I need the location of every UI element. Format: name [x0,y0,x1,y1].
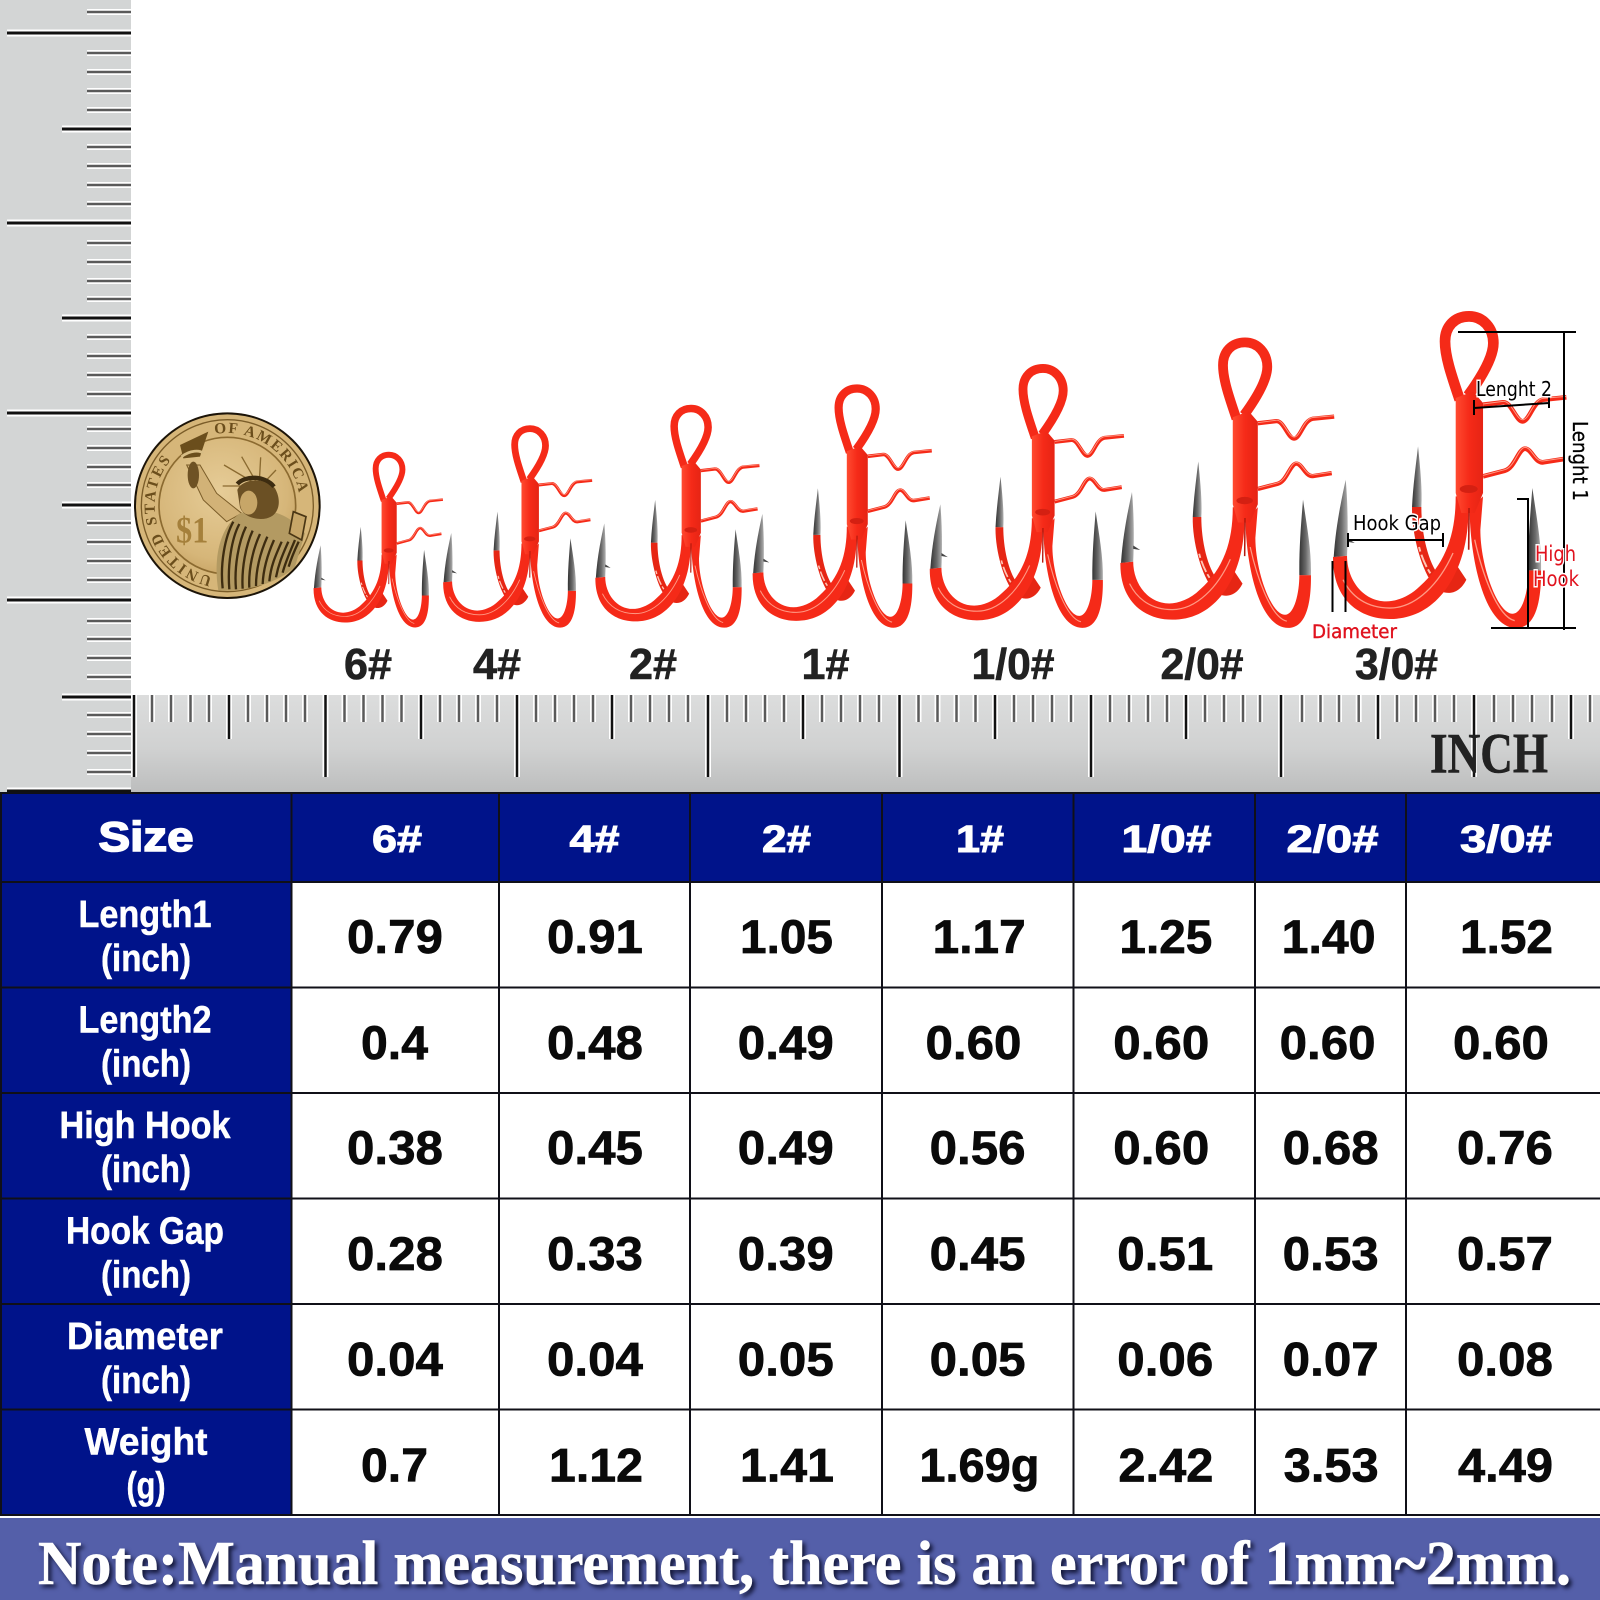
row: Weight values: 3.53 [1284,1438,1379,1492]
row labels: Weight [84,1422,208,1464]
specification table [0,793,1600,1516]
row: Diameter values: 0.06 [1117,1332,1213,1386]
annotation: High Hook: High [1535,542,1576,566]
hook size labels: 2/0# [1160,640,1244,689]
hook size labels: 1# [802,640,850,689]
row labels: (inch) [101,1149,191,1191]
row: High Hook values: 0.38 [347,1121,443,1174]
row: High Hook values: 0.56 [930,1121,1026,1174]
bottom horizontal ruler [131,695,1600,793]
hook: 1# [753,388,932,628]
row: Weight values: 1.41 [740,1438,834,1492]
row: Length1 values [347,910,1553,963]
table header text: 1/0# [1122,819,1212,861]
row labels: Diameter [67,1316,223,1358]
row: Length1 values: 0.91 [547,910,643,963]
row: Length2 values: 0.60 [1453,1016,1549,1069]
hook: 2/0# [1120,342,1334,628]
table header text: 4# [570,819,620,861]
row: Hook Gap values: 0.45 [930,1227,1026,1280]
note band [0,1518,1600,1600]
row labels: High Hook [60,1105,231,1147]
hook size labels: 4# [473,640,521,689]
row: Length1 values: 0.79 [347,910,443,963]
hook size labels: 6# [344,640,392,689]
annotation: Length 1: Lenght 1 [1568,421,1592,501]
row labels: (g) [126,1466,166,1508]
table header text: 3/0# [1460,819,1552,861]
annotation: Hook Gap: Hook Gap [1353,511,1441,535]
row: Hook Gap values: 0.53 [1283,1227,1379,1280]
row: Weight values: 2.42 [1118,1438,1213,1492]
row: Hook Gap values: 0.39 [738,1227,834,1280]
row: Weight values: 1.12 [549,1438,643,1492]
hook size labels: 2# [629,640,677,689]
row: Diameter values: 0.04 [547,1332,643,1386]
row labels: (inch) [101,1254,191,1296]
row: Length2 values: 0.60 [926,1016,1022,1069]
table header text: 6# [372,819,422,861]
row labels: (inch) [101,1044,191,1086]
row: Diameter values: 0.05 [738,1332,834,1386]
row: Weight values: 4.49 [1458,1438,1553,1492]
hook: 4# [443,429,592,628]
annotation: Length 2 [1474,377,1552,415]
hook: 2# [595,409,759,628]
row: Length1 values: 1.25 [1119,910,1212,963]
row: Length2 values [361,1016,1549,1069]
table header text: 1# [956,819,1004,861]
row labels: (inch) [101,938,191,980]
row: High Hook values [347,1121,1553,1174]
icon: one dollar coin for scale: UNITED STATES [144,456,210,586]
row: Weight values: 0.7 [361,1438,428,1492]
annotation: High Hook: Hook [1533,567,1580,591]
row labels: Length1 [78,894,212,936]
row: Length1 values: 1.52 [1460,910,1553,963]
hook: 1/0# [930,368,1124,628]
icon: one dollar coin for scale [134,412,321,599]
hook size labels [344,640,1438,689]
row: Hook Gap values: 0.51 [1117,1227,1213,1280]
row labels: (inch) [101,1360,191,1402]
row: Weight values [361,1438,1553,1492]
row: Diameter values: 0.04 [347,1332,443,1386]
annotation: High Hook [1517,499,1580,628]
hook: 6# [314,455,443,628]
table header text: 2/0# [1286,819,1378,861]
annotation: Hook Gap [1348,511,1443,547]
row labels: Length2 [78,1000,212,1042]
row: Diameter values [347,1332,1553,1386]
table header text: 2# [762,819,811,861]
row: Hook Gap values: 0.28 [347,1227,443,1280]
hook size labels: 3/0# [1355,640,1438,689]
row: Length1 values: 1.17 [933,910,1026,963]
table header text: Size [98,813,194,860]
row: Diameter values: 0.07 [1283,1332,1379,1386]
row: Length2 values: 0.60 [1113,1016,1209,1069]
row: Length2 values: 0.48 [547,1016,643,1069]
note text: Note:Manual measurement, there is an error of 1mm~2mm. [38,1530,1571,1598]
row: Weight values: 1.69g [919,1438,1039,1492]
table header band [0,793,1600,882]
row: High Hook values: 0.60 [1113,1121,1209,1174]
annotation: Length 2: Lenght 2 [1476,377,1552,401]
left vertical ruler [0,0,131,793]
row: Hook Gap values: 0.33 [547,1227,643,1280]
measurement annotations on 3/0# hook [1458,332,1592,630]
icon: one dollar coin for scale: $1 [176,511,208,552]
icon: one dollar coin for scale: OF AMERICA [214,422,308,492]
table row label column [0,882,291,1516]
row: Hook Gap values [347,1227,1553,1280]
row: High Hook values: 0.49 [738,1121,834,1174]
table header text [98,813,1552,861]
row: High Hook values: 0.45 [547,1121,643,1174]
annotation: Diameter: Diameter [1312,621,1397,643]
row: Length2 values: 0.4 [361,1016,428,1069]
row: Diameter values: 0.05 [930,1332,1026,1386]
row: Length1 values: 1.05 [740,910,833,963]
hook size labels: 1/0# [972,640,1054,689]
row labels: Hook Gap [66,1210,224,1252]
row: Length2 values: 0.60 [1280,1016,1376,1069]
row: Length1 values: 1.40 [1282,910,1376,963]
row labels [60,894,231,1508]
ruler unit label: INCH: INCH [1430,722,1548,786]
row: Hook Gap values: 0.57 [1457,1227,1553,1280]
row: Diameter values: 0.08 [1457,1332,1553,1386]
hook: 3/0# [1333,316,1566,628]
row: High Hook values: 0.68 [1283,1121,1379,1174]
annotation: Diameter [1312,561,1397,643]
row: High Hook values: 0.76 [1457,1121,1553,1174]
row: Length2 values: 0.49 [738,1016,834,1069]
